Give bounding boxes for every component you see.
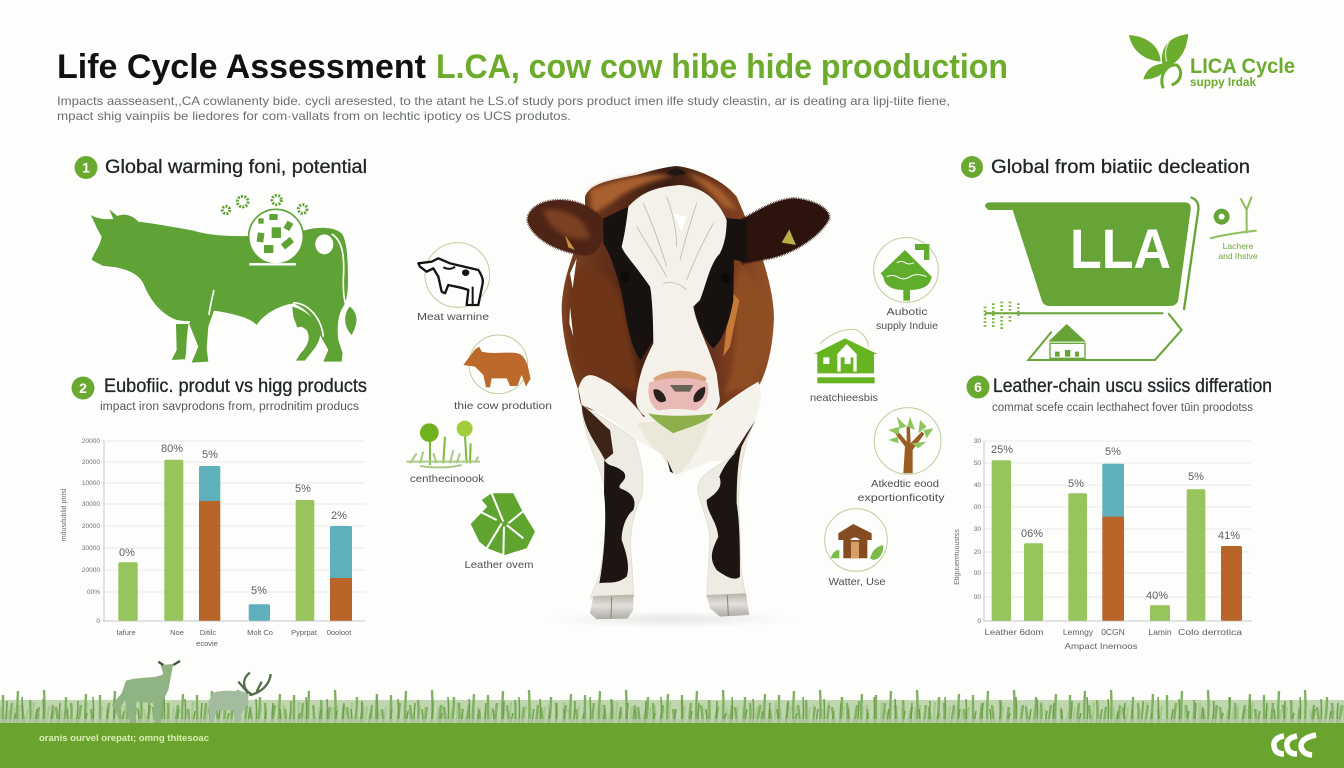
logo: LICA Cycle [1129, 34, 1295, 89]
bar chart: left: 30000 [82, 545, 100, 552]
subtitle text: mpact shig vainpiis be liedores for com·vallats from on lechtic ipoticy os UCS produtos. [57, 109, 571, 123]
panel 1: global warming potential [74, 156, 367, 363]
cow dewlap [637, 417, 710, 475]
right front leg [698, 420, 755, 617]
icon: LLA cart: and Ihstve [1218, 251, 1258, 261]
heading 2 [72, 376, 367, 413]
icon: brown house [825, 509, 887, 588]
animal: goat [112, 661, 180, 724]
cow mouth [648, 413, 713, 433]
bar chart: right: Colo derrotica [1178, 627, 1242, 637]
bar chart: right: 0 [977, 618, 981, 625]
cow ear left [528, 200, 604, 255]
heading 6: commat scefe ccain lecthahect fover tūin proodotss [992, 402, 1253, 414]
icon: tree [858, 408, 945, 504]
bar chart: left: 00% [87, 589, 100, 596]
bar chart: right: 40% [1146, 590, 1168, 602]
bar chart: right: 40 [974, 482, 981, 489]
bar chart: left: 20000 [82, 438, 100, 445]
bar chart: left: 10000 [82, 480, 100, 487]
icon: green tree house: supply Induie [876, 320, 938, 332]
icon: recycle [464, 493, 535, 571]
icon: tree: exportionficotity [858, 492, 945, 504]
bar chart: right: 20 [974, 549, 981, 556]
bar chart: right: Ampact Inernoos [1064, 641, 1138, 651]
heading 5: Global from biatiic decleation [991, 157, 1250, 178]
bar chart: left: 20000 [82, 523, 100, 530]
footer band [0, 723, 1344, 768]
icon: green tree house [874, 238, 938, 332]
bar chart: left: 0 [96, 618, 100, 625]
bar chart: left: Pyprpat [291, 628, 318, 637]
left icon column [407, 243, 552, 571]
heading 6 [966, 376, 1272, 414]
icon: brown house: Watter, Use [828, 576, 886, 588]
cow body [562, 166, 774, 427]
icon: green tree house: Aubotic [886, 306, 928, 318]
bar chart: left: Ditilc [200, 628, 216, 637]
logo: LICA Cycle: suppy Irdak [1190, 75, 1256, 89]
bar chart: left: Molt Co [247, 628, 273, 637]
bar chart: left: 5% [251, 585, 267, 597]
bar chart: left: ecovie [196, 639, 218, 648]
bar chart: right: Lamin [1148, 627, 1172, 637]
icon: brown cow: thie cow prodution [454, 400, 552, 412]
footer text: oranis ourvel orepatı; omng thitesoac [39, 733, 209, 743]
title: Life Cycle Assessment [57, 48, 426, 86]
icon: plants [407, 421, 485, 485]
bar chart: left: 30000 [82, 501, 100, 508]
icon: plants: centhecinoook [410, 473, 485, 485]
bar chart: right: Leather 6dom [984, 627, 1044, 637]
bar chart: right: 5% [1105, 446, 1121, 458]
icon: brown cow [454, 335, 552, 412]
icon: recycle: Leather ovem [464, 559, 534, 571]
bar chart: right: 25% [991, 444, 1013, 456]
footer logo [1274, 735, 1316, 755]
bar chart: right: 0CGN [1101, 627, 1125, 637]
bar chart: right [954, 438, 1252, 651]
bar chart: right: 5% [1188, 471, 1204, 483]
heading 5: 5 [968, 159, 976, 175]
panel 5: LCA cart [961, 156, 1258, 360]
bar chart: right: 30 [974, 526, 981, 533]
cow blaze [622, 185, 727, 423]
title: L.CA, cow cow hibe hide prooduction [436, 48, 1008, 86]
animal: deer [208, 673, 271, 723]
icon: green house [810, 329, 878, 404]
bar chart: right: 00 [974, 570, 981, 577]
panel 6: bar chart right [954, 376, 1272, 651]
bar chart: right: Lemngy [1063, 627, 1094, 637]
bar chart: left: 5% [295, 483, 311, 495]
bar chart: right: Etiguuemtuuustss [954, 529, 961, 585]
cow ear right [731, 198, 829, 263]
heading 2: 2 [79, 380, 87, 396]
heading 1: 1 [82, 160, 90, 176]
center image: cow [528, 166, 829, 628]
bar chart: left: mdusdublid ptrisl [61, 488, 68, 541]
icon: LLA cart: LLA [1070, 217, 1171, 280]
bar chart: left: Noe [170, 628, 184, 637]
bar chart: right: 5% [1068, 478, 1084, 490]
left front leg [582, 405, 643, 619]
heading 2: impact iron savprodons from, prrodnitim producs [100, 401, 359, 413]
bar chart: right: 00 [974, 594, 981, 601]
bar chart: right: 50 [974, 460, 981, 467]
bar chart: right: 41% [1218, 530, 1240, 542]
bar chart: left: 5% [202, 449, 218, 461]
bar chart: left [61, 438, 365, 648]
logo: LICA Cycle: LICA Cycle [1190, 55, 1295, 78]
heading 2: Eubofiic. produt vs higg products [104, 376, 367, 397]
cow head dark patches [603, 207, 747, 360]
bar chart: left: 2% [331, 510, 347, 522]
animals in grass [112, 661, 271, 724]
bar chart: right: 00 [974, 504, 981, 511]
title [57, 48, 1008, 86]
right icon column [810, 238, 945, 588]
bar chart: left: Iafure [116, 628, 136, 637]
bar chart: left: 20000 [82, 567, 100, 574]
panel 2: bar chart left [61, 376, 367, 648]
bar chart: right: 06% [1021, 528, 1043, 540]
bar chart: left: 0ooloot [327, 628, 352, 637]
bar chart: left: 80% [161, 443, 183, 455]
icon: LLA cart [985, 197, 1258, 360]
heading 1: Global warming foni, potential [105, 157, 367, 178]
heading 6: Leather-chain uscu ssiics differation [993, 376, 1272, 397]
grass strip [0, 685, 1344, 723]
icon: green house: neatchieesbis [810, 392, 878, 404]
cow nose [653, 371, 707, 387]
cow eyes [620, 271, 630, 282]
icon: tree: Atkedtic eood [871, 478, 939, 490]
icon: black outline cow: Meat warnine [417, 311, 489, 323]
bar chart: left: 0% [119, 547, 135, 559]
bar chart: right: 30 [974, 438, 981, 445]
icon: green cow silhouette with globe [91, 195, 356, 363]
subtitle text: Impacts aasseasent,,CA cowlanenty bide. cycli aresested, to the atant he LS.of study pors product imen ilfe study cleastin, ar is deating ara lipj-tiite fiene, [57, 94, 950, 108]
cow chest [578, 375, 761, 475]
bar chart: left: 20000 [82, 459, 100, 466]
icon: black outline cow [417, 243, 490, 323]
subtitle text [57, 94, 950, 123]
cow coat shading [568, 173, 770, 393]
icon: LLA cart: Lachere [1223, 241, 1254, 251]
heading 6: 6 [974, 379, 982, 395]
